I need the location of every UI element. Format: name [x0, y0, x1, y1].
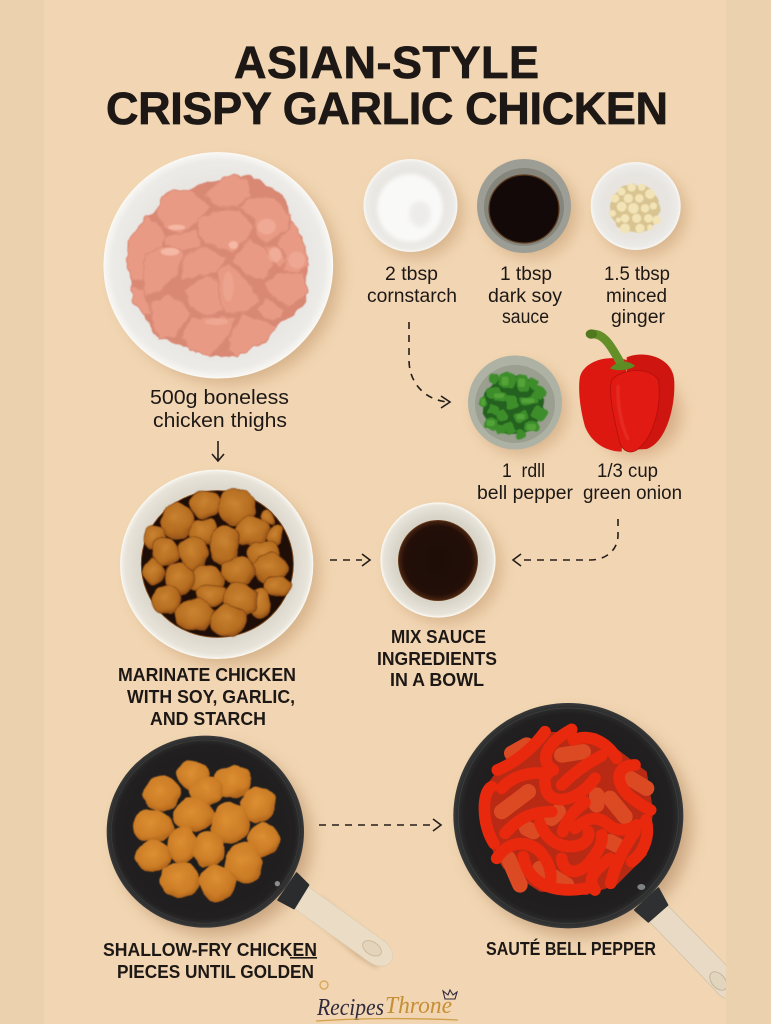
label: green onion: green onion — [583, 483, 682, 504]
label: cornstarch: 2 tbsp — [385, 264, 438, 285]
bowl: dark soy sauce — [477, 159, 577, 258]
icon: red bell pepper — [579, 329, 680, 455]
label: marinate chicken: MARINATE CHICKEN — [118, 665, 296, 685]
label: mix sauce: IN A BOWL — [390, 670, 484, 690]
bowl: marinated chicken — [121, 470, 318, 664]
label: minced ginger: 1.5 tbsp — [604, 264, 670, 285]
red pepper strips — [482, 729, 653, 895]
title: CRISPY GARLIC CHICKEN — [106, 83, 668, 134]
label: red bell pepper — [477, 461, 574, 504]
pan: sauteed bell pepper — [453, 703, 730, 998]
label: shallow-fry chicken — [103, 940, 317, 982]
bowl: cornstarch — [364, 159, 463, 258]
label: saute bell pepper: SAUTÉ BELL PEPPER — [486, 938, 656, 959]
plate of raw chicken — [104, 153, 339, 383]
label: marinate chicken: WITH SOY, GARLIC, — [127, 687, 295, 707]
chicken pieces — [143, 489, 291, 636]
label: mix sauce: INGREDIENTS — [377, 649, 497, 669]
label: shallow-fry chicken: SHALLOW-FRY CHICKEN — [103, 940, 317, 960]
label: cornstarch — [367, 264, 457, 307]
label: chicken thighs — [150, 386, 289, 432]
fried chicken pieces — [131, 760, 280, 901]
label: dark soy sauce: 1 tbsp — [500, 264, 552, 285]
ginger pieces — [609, 183, 661, 233]
arrow: marinade to sauce — [330, 554, 370, 566]
logo: Recipes Throne — [316, 981, 458, 1021]
label: mix sauce: MIX SAUCE — [391, 627, 486, 647]
label: cornstarch: cornstarch — [367, 286, 457, 307]
label: minced ginger: minced — [606, 286, 667, 307]
label: dark soy sauce: dark soy — [488, 286, 563, 307]
label: green onion — [583, 461, 682, 504]
arrow: chicken pan to pepper pan — [319, 819, 441, 831]
label: minced ginger: ginger — [611, 307, 666, 328]
label: red bell pepper: bell pepper — [477, 483, 574, 504]
marinade — [141, 491, 293, 637]
label: marinate chicken: AND STARCH — [150, 709, 266, 729]
chicken highlights — [161, 219, 305, 325]
bowl: green onion — [468, 356, 567, 454]
pan handle — [278, 873, 393, 968]
bowl: minced ginger — [591, 162, 686, 256]
logo: Recipes Throne: Throne — [385, 993, 452, 1019]
label: shallow-fry chicken: PIECES UNTIL GOLDEN — [117, 962, 314, 982]
label: green onion: 1/3 cup — [597, 461, 658, 482]
title: ASIAN-STYLE — [234, 37, 539, 88]
arrow: green onion to sauce — [513, 519, 618, 566]
pepper stem — [591, 334, 622, 365]
label: dark soy sauce: sauce — [502, 307, 549, 328]
label: dark soy sauce — [488, 264, 563, 328]
title — [106, 37, 668, 134]
arrow: chicken down to marinade — [212, 441, 224, 461]
arrow: cornstarch to green onion — [409, 322, 450, 408]
green pieces — [479, 372, 549, 439]
pan: shallow-fried chicken — [107, 736, 393, 968]
logo: Recipes Throne: Recipes — [316, 995, 384, 1021]
bowl: mixed sauce — [381, 503, 501, 623]
label: red bell pepper: 1 rdll — [502, 461, 545, 482]
raw chicken pieces — [127, 175, 308, 357]
label: mix sauce — [377, 627, 497, 690]
label: chicken thighs: chicken thighs — [153, 409, 287, 432]
label: minced ginger — [604, 264, 670, 328]
pan handle — [635, 888, 730, 998]
label: chicken thighs: 500g boneless — [150, 386, 289, 409]
label: marinate chicken — [118, 665, 296, 729]
